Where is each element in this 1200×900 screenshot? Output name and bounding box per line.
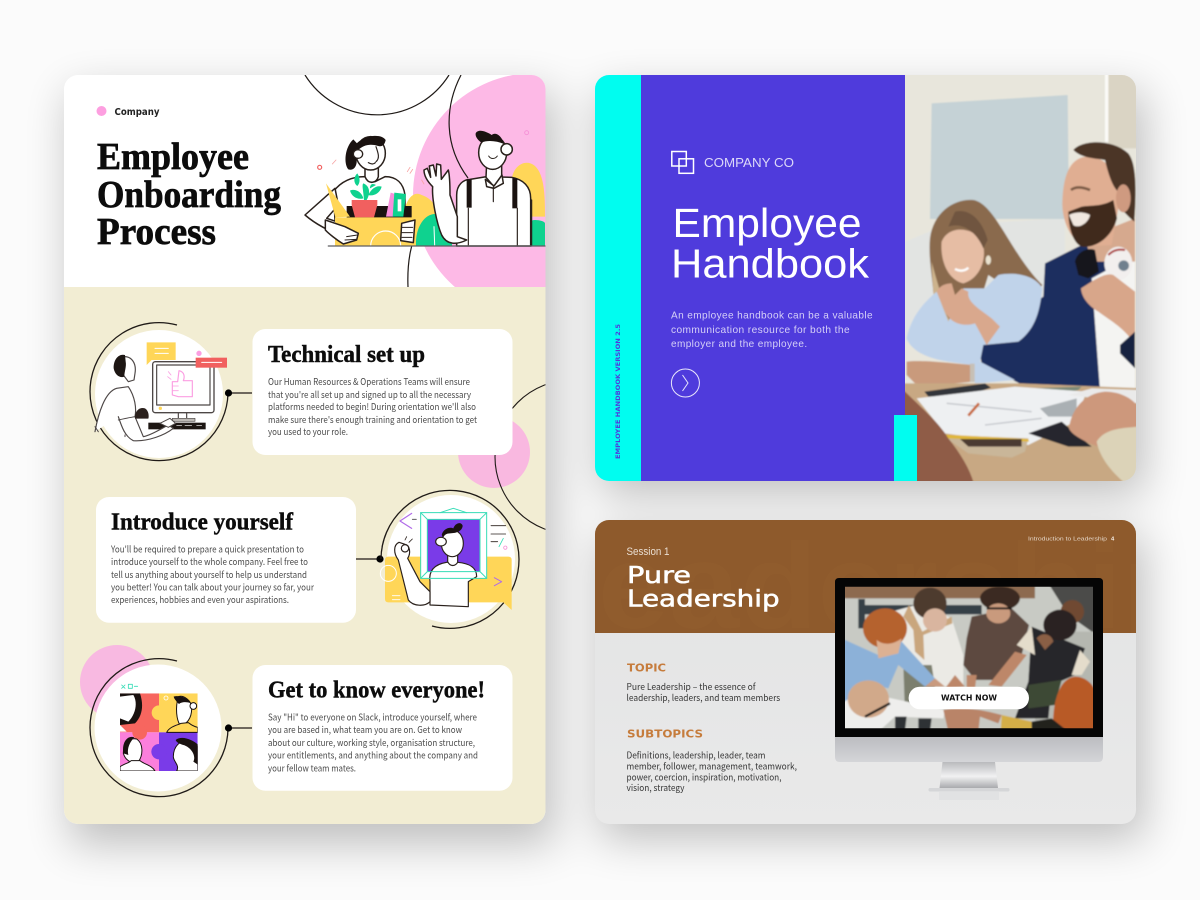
panel: employee handbook bbox=[595, 72, 1145, 488]
text card: you are based in, what team you are on. Get to know bbox=[268, 722, 463, 736]
text card: You'll be required to prepare a quick presentation to bbox=[110, 542, 304, 556]
logo bbox=[672, 152, 794, 173]
brown header band bbox=[595, 520, 1136, 633]
subtopics block bbox=[626, 727, 797, 794]
watermark word: Leadership bbox=[520, 518, 1200, 654]
photo: colleagues laughing at a table bbox=[902, 72, 1145, 488]
text card bbox=[252, 329, 512, 455]
subtopics block: member, follower, management, teamwork, bbox=[626, 759, 797, 772]
text card: Technical set up bbox=[268, 342, 425, 368]
connector with dot bbox=[356, 555, 384, 563]
text card: your entitlements, and anything about the company and bbox=[268, 748, 478, 762]
icon: arrow button bbox=[671, 369, 699, 397]
monitor bbox=[835, 578, 1103, 800]
page label bbox=[1028, 536, 1114, 542]
woman bbox=[305, 137, 405, 237]
subtopics block: vision, strategy bbox=[626, 781, 685, 794]
decorative pink circle bbox=[80, 645, 150, 713]
watch now button: WATCH NOW bbox=[941, 694, 997, 703]
title: Employee bbox=[97, 136, 249, 178]
title: Process bbox=[97, 211, 216, 253]
text card: introduce yourself to the whole company. Feel free to bbox=[111, 554, 308, 568]
vertical version label: EMPLOYEE HANDBOOK VERSION 2.5 bbox=[615, 324, 622, 459]
text card: Say "Hi" to everyone on Slack, introduce yourself, where bbox=[268, 710, 477, 724]
subtopics block: SUBTOPICS bbox=[627, 727, 703, 740]
title: Onboarding bbox=[97, 174, 281, 216]
step 3: get to know everyone bbox=[80, 645, 512, 797]
decorative arcs in header bbox=[305, 75, 468, 287]
topic block: TOPIC bbox=[627, 662, 666, 675]
description: communication resource for both the bbox=[671, 325, 850, 336]
text card bbox=[252, 665, 512, 791]
photo: team hands stacked bbox=[842, 583, 1097, 732]
subtopics block: Definitions, leadership, leader, team bbox=[626, 748, 766, 761]
drop shadows bbox=[70, 92, 1144, 844]
text card: you used to your role. bbox=[268, 424, 348, 438]
company marker bbox=[96, 106, 160, 118]
connector with dot bbox=[225, 724, 252, 732]
illustration: two coworkers with a box bbox=[305, 131, 545, 246]
logo: COMPANY CO bbox=[704, 156, 794, 170]
heading bbox=[674, 208, 869, 278]
icon: person at computer bbox=[90, 323, 228, 461]
topic block bbox=[626, 662, 780, 704]
purple cover area bbox=[641, 75, 905, 481]
title bbox=[97, 142, 281, 245]
connector with dot bbox=[225, 389, 252, 397]
step 1: technical set up bbox=[90, 323, 513, 461]
session heading: Leadership bbox=[627, 587, 780, 613]
text card: experiences, hobbies and even your aspirations. bbox=[111, 592, 289, 606]
watch now button bbox=[909, 687, 1029, 709]
description: An employee handbook can be a valuable bbox=[671, 311, 873, 322]
text card bbox=[96, 497, 356, 623]
panel: employee onboarding process bbox=[64, 75, 546, 824]
page label: Introduction to Leadership bbox=[1028, 537, 1107, 543]
cyan accent block bbox=[894, 415, 917, 481]
text card: Our Human Resources & Operations Teams will ensure bbox=[268, 374, 470, 388]
heading: Handbook bbox=[671, 240, 870, 286]
text card: make sure there's enough training and orientation to get bbox=[268, 412, 477, 426]
session heading: Session 1 bbox=[626, 546, 670, 558]
session heading bbox=[626, 546, 780, 613]
topic block: leadership, leaders, and team members bbox=[626, 691, 780, 704]
heading: Employee bbox=[672, 200, 862, 246]
company marker: Company bbox=[114, 107, 160, 118]
topic block: Pure Leadership – the essence of bbox=[626, 680, 757, 693]
text card: Get to know everyone! bbox=[268, 678, 485, 704]
panel section: beige lower area bbox=[64, 287, 546, 824]
step 2: introduce yourself bbox=[96, 490, 519, 628]
page label: 4 bbox=[1111, 537, 1115, 543]
text card: tell us anything about yourself to help us understand bbox=[111, 567, 307, 581]
icon: puzzle of faces bbox=[90, 659, 228, 797]
text card: platforms needed to begin! During orientation we'll also bbox=[268, 399, 476, 413]
description bbox=[671, 311, 873, 350]
man bbox=[424, 136, 531, 246]
decorative pink circle and arc on the right edge bbox=[458, 416, 530, 488]
icon: framed portrait bbox=[380, 490, 519, 628]
text card: your fellow team mates. bbox=[268, 760, 356, 774]
subtopics block: power, coercion, inspiration, motivation, bbox=[626, 770, 782, 784]
text card: you better! You can talk about your journey so far, your bbox=[111, 580, 314, 594]
text card: about our culture, working style, organisation structure, bbox=[268, 735, 475, 749]
panel: pure leadership bbox=[595, 520, 1136, 824]
description: employer and the employee. bbox=[671, 339, 808, 350]
text card: that you're all set up and signed up to all the necessary bbox=[268, 387, 471, 401]
text card: Introduce yourself bbox=[111, 510, 294, 536]
session heading: Pure bbox=[627, 563, 691, 589]
decorative pink circle in header bbox=[413, 75, 546, 287]
